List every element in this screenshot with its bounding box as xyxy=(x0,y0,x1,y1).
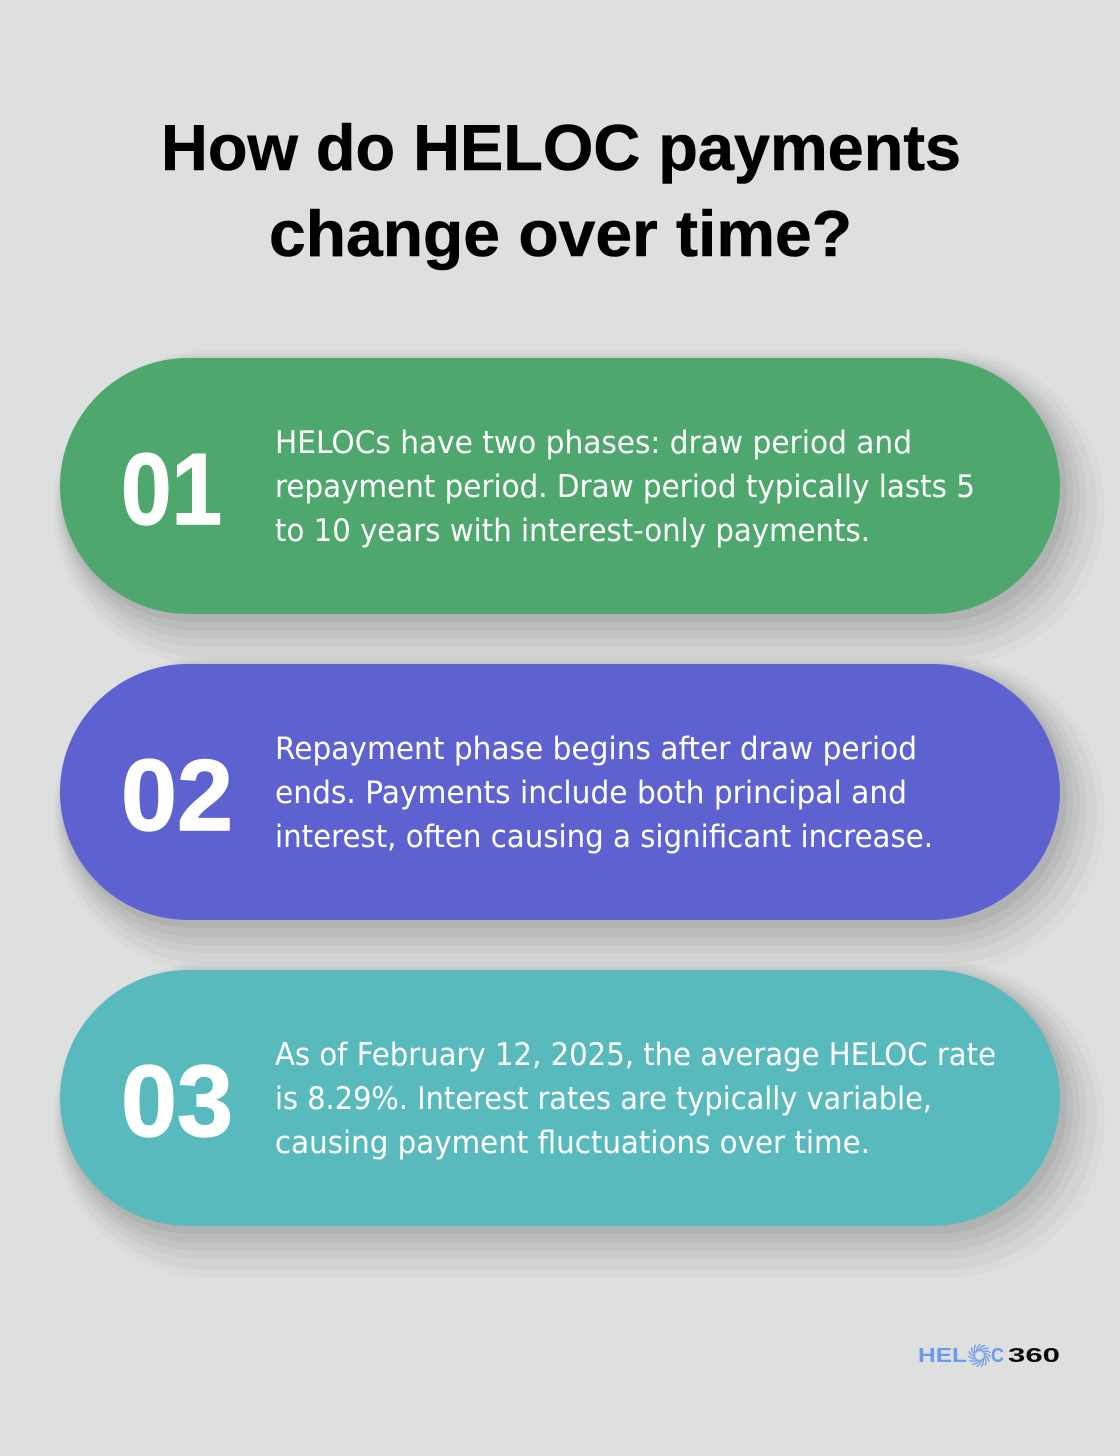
text block: step 03: causing payment fluctuations over time. xyxy=(275,1125,870,1161)
text block: step 03: As of February 12, 2025, the average HELOC rate xyxy=(275,1037,996,1073)
text block: step 01: repayment period. Draw period typically lasts 5 xyxy=(275,469,975,505)
text block: step 02: interest, often causing a significant increase. xyxy=(275,819,933,855)
number: 02: 02 xyxy=(121,740,233,852)
title: change over time? xyxy=(269,197,852,270)
panel: step 01 xyxy=(53,350,1105,666)
text block: step 01: HELOCs have two phases: draw period and xyxy=(275,425,912,461)
logo: HELOC360: HEL xyxy=(918,1345,967,1367)
number: 01: 01 xyxy=(121,434,222,546)
text block: step 03: is 8.29%. Interest rates are typically variable, xyxy=(275,1081,932,1117)
title: How do HELOC payments xyxy=(161,111,961,184)
text block: step 03 xyxy=(275,1037,996,1161)
icon: swirl xyxy=(968,1344,991,1367)
text block: step 01: to 10 years with interest-only payments. xyxy=(275,513,870,549)
panel: step 02 xyxy=(53,656,1105,972)
text block: step 02: ends. Payments include both principal and xyxy=(275,775,907,811)
logo: HELOC360: 360 xyxy=(1008,1345,1060,1367)
text block: step 02 xyxy=(275,731,933,855)
text block: step 01 xyxy=(275,425,975,549)
panel: step 03 xyxy=(53,962,1105,1278)
title xyxy=(161,111,961,270)
logo: HELOC360: C xyxy=(991,1345,1004,1367)
logo: HELOC360 xyxy=(918,1344,1060,1367)
text block: step 02: Repayment phase begins after draw period xyxy=(275,731,917,767)
number: 03: 03 xyxy=(121,1046,233,1158)
